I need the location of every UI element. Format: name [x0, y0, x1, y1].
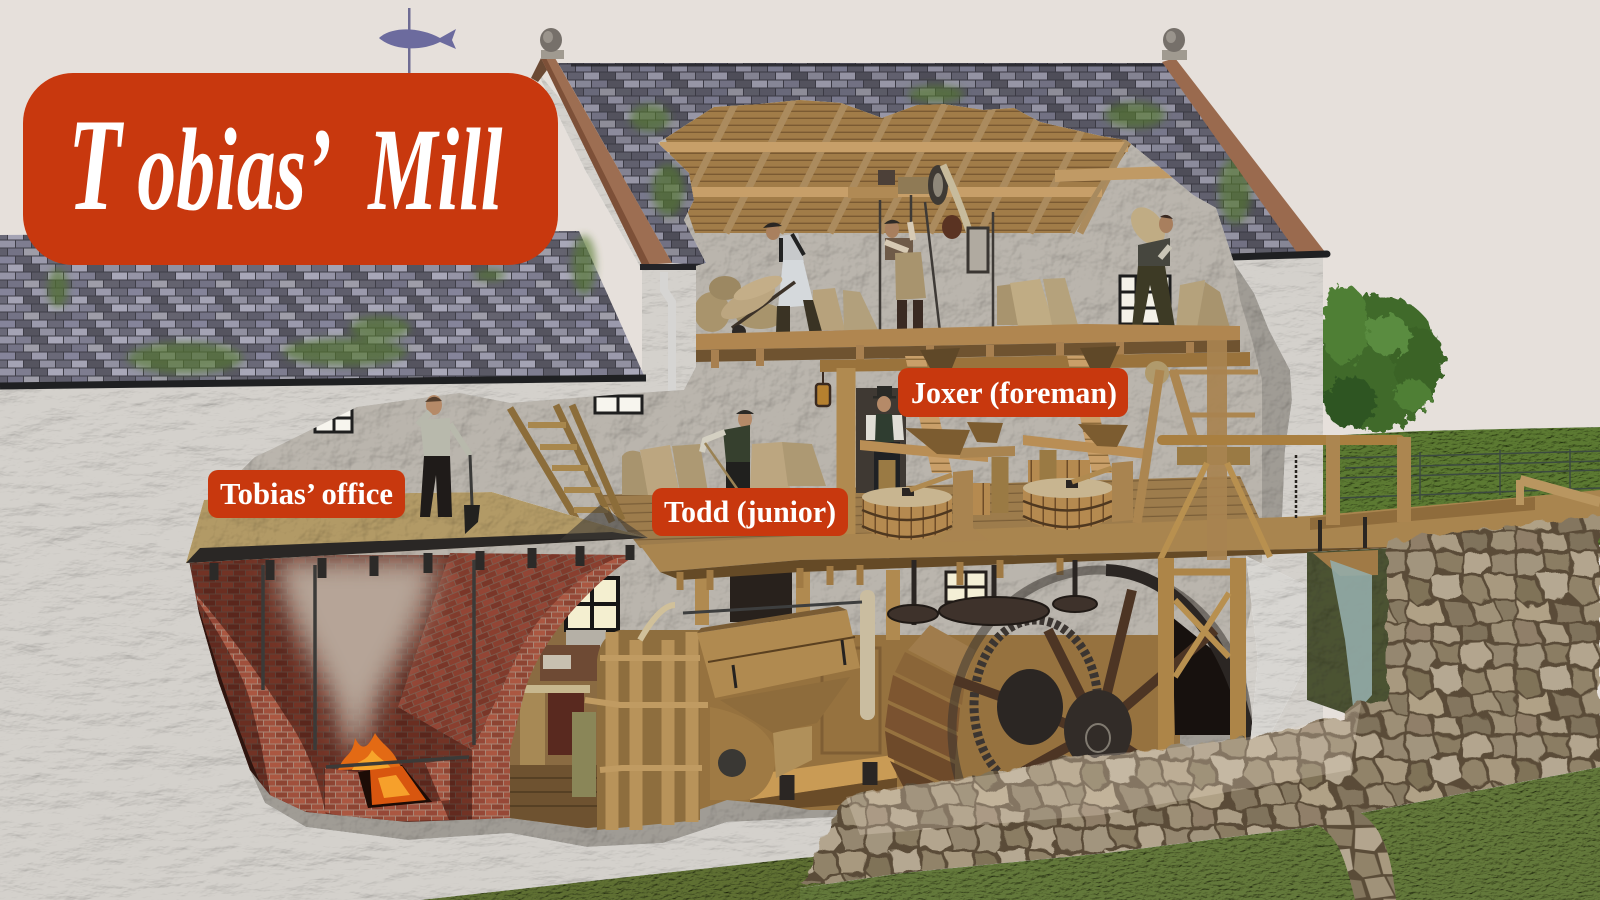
grain hopper box — [683, 590, 875, 733]
title text: obias’ — [137, 104, 332, 235]
title text: Mill — [367, 104, 503, 235]
grain sacks upper floor centre — [997, 278, 1078, 326]
fan housing — [710, 707, 812, 800]
moss on left roof — [48, 235, 596, 374]
worker filling sack at the hoist — [884, 220, 926, 333]
doorway middle floor — [856, 388, 906, 493]
wooden launder spout — [1313, 550, 1378, 576]
grass bank right — [800, 767, 1600, 900]
Joxer figure with top hat — [866, 386, 904, 490]
right barge board — [1162, 58, 1325, 254]
downpipe — [664, 272, 672, 395]
office furniture behind kiln — [510, 578, 618, 830]
cutaway rim through the wall — [189, 100, 1292, 847]
worker with sack trolley — [716, 222, 823, 339]
whitewashed mill wall — [0, 70, 1323, 900]
millstone barrel front left — [862, 475, 952, 540]
gravel floor of Tobias' office — [186, 492, 648, 580]
table posts — [887, 450, 1048, 513]
solid rim upper right — [1106, 570, 1248, 800]
upper floor timber deck — [695, 324, 1250, 372]
title text: T — [68, 92, 124, 239]
eaves gutter on gable left — [640, 264, 706, 270]
right chimney finial — [1162, 28, 1187, 60]
label: Tobias' office — [208, 470, 405, 518]
iron tie rods — [263, 560, 474, 767]
small window centre left — [595, 396, 642, 413]
kiln side brick wall — [398, 553, 630, 750]
paddles on rear of wheel — [885, 625, 975, 815]
Todd figure shovelling — [702, 410, 754, 494]
left wing gutter — [0, 378, 646, 386]
wall fragment in front of wheel — [1246, 556, 1305, 745]
front wheel rim — [952, 570, 1248, 890]
table boards — [860, 440, 988, 462]
stone path through the grass — [1312, 810, 1396, 900]
ceiling joists under gravel floor — [214, 545, 630, 580]
stone retaining wall right — [1387, 516, 1600, 830]
title banner — [23, 73, 558, 265]
right brick arch — [472, 557, 633, 820]
middle floor deck surface — [600, 476, 1260, 548]
label: Joxer (foreman) — [898, 368, 1128, 417]
label: Tobias' office: Tobias’ office — [220, 476, 393, 511]
mill interior — [180, 95, 1300, 830]
lower floor rear timber panels — [700, 635, 1180, 810]
grass bank left — [420, 850, 900, 900]
label: Todd (junior) — [652, 488, 848, 536]
grain sacks middle floor — [622, 442, 826, 495]
Tobias figure with shovel — [418, 395, 480, 534]
moss on main roof — [630, 85, 1251, 224]
roof underside timber — [655, 100, 1160, 233]
label: Todd (junior): Todd (junior) — [664, 494, 836, 529]
window upper floor — [1120, 276, 1170, 324]
dry stone wall foreground — [800, 700, 1600, 885]
left wing slate roof — [0, 231, 646, 386]
eaves gutter on gable right — [1201, 254, 1327, 258]
kiln back brickwork — [186, 555, 486, 830]
left dark crescent — [196, 600, 270, 805]
hearth brick surround — [325, 760, 450, 822]
left brick arch — [187, 585, 326, 815]
middle floor edge and water trough — [640, 490, 1600, 580]
roof cross beam — [1055, 166, 1176, 182]
lower floor window — [946, 572, 986, 602]
waterwheel — [885, 560, 1248, 890]
lantern — [816, 372, 830, 406]
wheel hubs — [997, 669, 1063, 745]
main gable slate roof — [558, 63, 1305, 266]
label: Joxer (foreman): Joxer (foreman) — [911, 375, 1117, 410]
hopper timber frame — [572, 605, 708, 830]
fish weathervane — [379, 8, 456, 78]
tree behind mill — [1316, 285, 1444, 430]
hedge and fence in the background — [1323, 427, 1600, 545]
interior stone back wall — [242, 100, 1262, 722]
mossy back wall of race — [1307, 548, 1390, 715]
hoppers — [905, 428, 970, 455]
fire — [338, 733, 426, 805]
pit wheel gears — [888, 596, 1097, 625]
base beam with iron straps — [750, 755, 897, 812]
lighter tint over wall top — [846, 703, 1361, 835]
millstone table posts in front — [940, 461, 1133, 542]
small window left — [315, 406, 352, 432]
hoist machinery — [848, 165, 993, 335]
door panel right of hopper — [822, 648, 880, 753]
lower floor doorway — [730, 568, 792, 622]
grain sacks upper floor right — [1176, 280, 1230, 328]
worker carrying sack on shoulder — [1131, 207, 1174, 326]
left chimney finial — [540, 28, 564, 59]
wooden ladder — [510, 405, 622, 522]
timber posts middle floor — [836, 368, 856, 535]
upper trestle and trough rails — [1137, 340, 1600, 560]
millstone tables and hoppers — [860, 422, 1147, 515]
wheel pit shadow — [1172, 617, 1232, 735]
smoke rising from fire — [275, 560, 438, 750]
gear ring — [974, 620, 1098, 790]
grain chutes under upper floor — [905, 346, 1120, 473]
millstone barrel front right — [1023, 468, 1113, 530]
spokes — [955, 590, 1215, 790]
gear shafts — [914, 560, 1075, 625]
rear millstone tubs — [966, 460, 1090, 515]
grain sacks on upper floor left — [694, 276, 878, 332]
waterfall — [1330, 560, 1372, 715]
left barge board — [531, 58, 672, 265]
lower wheel trestle — [1166, 558, 1238, 750]
timber posts lower floor — [702, 570, 893, 640]
joists below middle floor — [680, 558, 1060, 590]
